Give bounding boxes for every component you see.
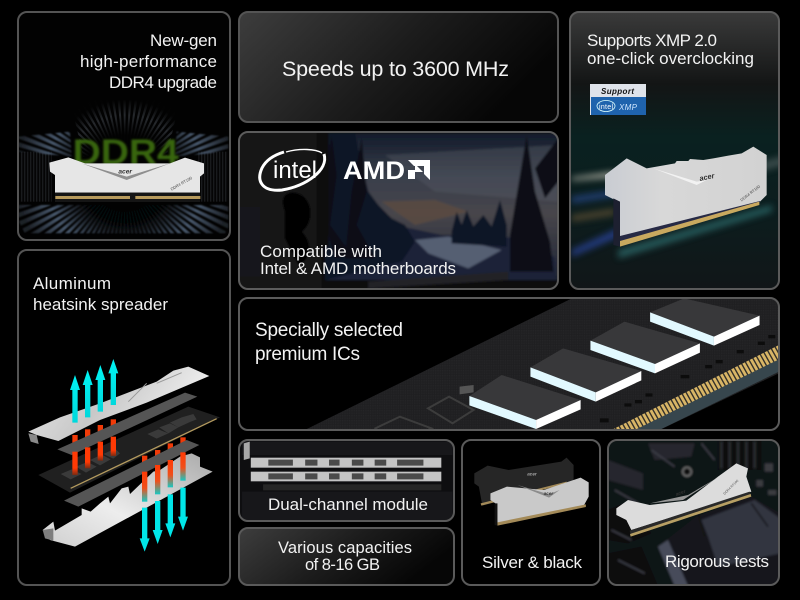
XMP RAM module: acer xyxy=(699,171,716,183)
heading: aluminum: heatsink spreader xyxy=(33,295,168,314)
heading: aluminum xyxy=(33,274,168,314)
two RAM modules xyxy=(474,458,589,526)
panel: silver and black xyxy=(462,440,600,585)
intel logo xyxy=(260,149,325,190)
XMP RAM module xyxy=(605,147,767,247)
RAM module: DDR4 RT100 xyxy=(723,479,740,496)
compatibility text: Intel & AMD motherboards xyxy=(260,259,456,278)
xmp support badge: XMP xyxy=(618,103,638,112)
xmp support badge xyxy=(590,84,646,115)
panel: dual-channel xyxy=(239,440,454,522)
panel: DDR4 upgrade xyxy=(18,12,230,252)
RAM module: acer xyxy=(675,488,688,498)
panel: premium ICs xyxy=(239,298,782,435)
panel: speeds xyxy=(239,12,558,122)
circuit board xyxy=(295,298,782,435)
AMD logo: AMD xyxy=(343,157,405,185)
compatibility text xyxy=(260,242,456,278)
xmp support badge: Support xyxy=(601,87,634,96)
down arrows xyxy=(140,488,188,552)
IC text xyxy=(255,320,403,365)
panel: compatibility xyxy=(235,125,565,295)
speed text: Speeds up to 3600 MHz xyxy=(282,57,509,81)
IC text: Specially selected xyxy=(255,320,403,341)
up arrows xyxy=(70,359,118,423)
heading: new-gen xyxy=(80,31,217,92)
heading: new-gen: DDR4 upgrade xyxy=(109,73,217,92)
rigorous text: Rigorous tests xyxy=(665,552,769,571)
panel: aluminum heatsink xyxy=(18,250,230,585)
panel: XMP overclocking xyxy=(570,12,788,289)
xmp support badge: intel xyxy=(599,104,613,111)
XMP RAM module: DDR4 RT100 xyxy=(739,183,762,202)
intel logo: intel xyxy=(273,157,317,184)
xmp text: one-click overclocking xyxy=(587,49,754,68)
RAM module: acer xyxy=(118,168,132,175)
panel: rigorous tests xyxy=(608,440,780,586)
dual text: Dual-channel module xyxy=(268,495,428,514)
exploded heatsink illustration xyxy=(28,359,220,552)
IC text: premium ICs xyxy=(255,344,360,365)
RAM module xyxy=(616,463,751,537)
xmp text xyxy=(587,31,754,68)
compatibility text: Compatible with xyxy=(260,242,382,261)
heading: aluminum: Aluminum xyxy=(33,274,111,293)
capacities text: Various capacities xyxy=(278,539,412,557)
monitor wallpaper photo xyxy=(240,133,557,288)
AMD logo xyxy=(343,157,430,185)
memory sticks xyxy=(251,458,441,490)
heading: new-gen: high-performance xyxy=(80,52,217,71)
heading: new-gen: New-gen xyxy=(150,31,217,50)
RAM module xyxy=(49,157,204,202)
speed streaks xyxy=(572,155,788,258)
big green DDR4 letters: DDR4 xyxy=(73,133,179,172)
two RAM modules: acer xyxy=(527,472,537,477)
ddr4 light rays xyxy=(20,102,228,252)
RAM module: DDR4 RT100 xyxy=(170,175,193,192)
two RAM modules: acer xyxy=(544,491,553,496)
panel: capacities xyxy=(239,528,454,585)
capacitors xyxy=(460,335,775,422)
motherboard photo xyxy=(608,440,780,586)
silver text: Silver & black xyxy=(482,553,582,572)
silver heatsink block xyxy=(658,497,780,586)
memory chips xyxy=(469,298,760,429)
xmp text: Supports XMP 2.0 xyxy=(587,31,717,50)
capacities text xyxy=(278,539,412,574)
capacities text: of 8-16 GB xyxy=(305,556,380,574)
